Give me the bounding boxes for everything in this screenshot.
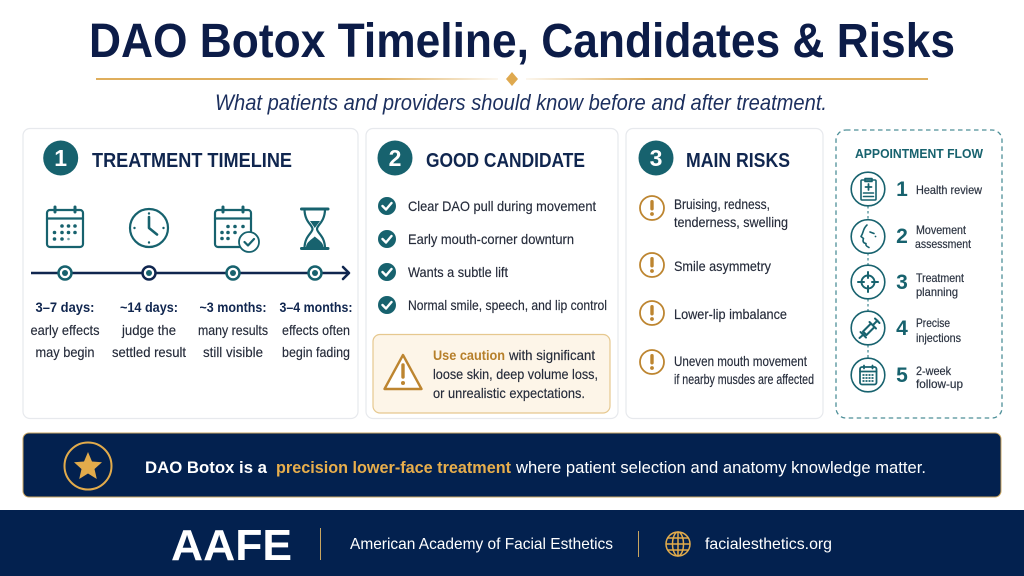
candidate checklist: Normal smile, speech, and lip control xyxy=(408,297,607,313)
milestone 3 months: many results xyxy=(198,322,268,338)
milestone 3-4 months: begin fading xyxy=(282,344,350,360)
step 2: movement assessment: Movement xyxy=(916,223,967,237)
milestone 3-4 months xyxy=(280,299,352,360)
number badge 1 xyxy=(43,140,78,176)
icon: hourglass xyxy=(302,209,328,248)
footer website: facialesthetics.org xyxy=(705,536,832,553)
icon: star badge xyxy=(64,442,112,490)
step 4: precise injections: 4 xyxy=(896,317,908,340)
icon: calendar with check xyxy=(215,207,259,252)
panel: appointment flow xyxy=(836,130,1002,418)
heading: main risks: MAIN RISKS xyxy=(686,150,790,172)
number badge 3: 3 xyxy=(650,145,662,171)
panel: main risks xyxy=(626,128,823,418)
candidate checklist: Early mouth-corner downturn xyxy=(408,231,574,247)
step 5: 2-week follow-up: 2-week xyxy=(916,364,952,378)
step 2: movement assessment xyxy=(851,220,972,253)
heading: good candidate: GOOD CANDIDATE xyxy=(426,150,585,172)
milestone 3 months xyxy=(198,299,268,360)
risk: lower-lip imbalance: Lower-lip imbalance xyxy=(674,306,787,322)
milestone 14 days: settled result xyxy=(112,344,186,360)
milestone 14 days: judge the xyxy=(121,322,176,338)
risk: smile asymmetry: Smile asymmetry xyxy=(674,258,771,274)
panel: treatment timeline xyxy=(23,128,358,418)
icon: calendar xyxy=(47,207,83,247)
panel: good candidate xyxy=(366,128,618,418)
milestone 3-7 days: early effects xyxy=(30,322,100,338)
step 1: health review: Health review xyxy=(916,183,982,197)
key message banner: where patient selection and anatomy knowledge matter. xyxy=(515,458,926,477)
candidate checklist: Wants a subtle lift xyxy=(408,264,508,280)
risk: uneven mouth movement: if nearby musdes are affected xyxy=(674,372,814,387)
step 4: precise injections: injections xyxy=(916,331,961,345)
number badge 3 xyxy=(638,140,674,176)
step 2: movement assessment: 2 xyxy=(896,225,908,248)
subtitle: What patients and providers should know before and after treatment. xyxy=(215,90,827,115)
step 5: 2-week follow-up: follow-up xyxy=(916,377,963,391)
risk: bruising: tenderness, swelling xyxy=(674,214,788,230)
number badge 2 xyxy=(378,140,412,176)
risk: bruising: Bruising, redness, xyxy=(674,196,770,212)
risk: bruising xyxy=(640,196,788,230)
callout: use caution: Use caution xyxy=(433,347,505,363)
callout: use caution: loose skin, deep volume loss, xyxy=(433,366,598,382)
icon: warning triangle xyxy=(384,355,422,389)
footer logo: AAFE: AAFE xyxy=(171,521,292,570)
key message banner xyxy=(23,433,1001,497)
milestone 3-7 days: 3–7 days: xyxy=(36,299,94,315)
number badge 1: 1 xyxy=(54,145,67,171)
milestone 14 days xyxy=(112,299,186,360)
step 1: health review xyxy=(851,172,982,206)
callout: use caution: with significant xyxy=(508,347,595,363)
milestone 3-4 months: 3–4 months: xyxy=(280,299,352,315)
icon: globe xyxy=(666,532,690,556)
footer xyxy=(0,510,1024,576)
risk: uneven mouth movement: Uneven mouth movement xyxy=(674,353,807,369)
step 1: health review: 1 xyxy=(896,178,908,201)
step 2: movement assessment: assessment xyxy=(915,237,972,251)
title divider with diamond xyxy=(96,72,928,86)
milestone 3-7 days: may begin xyxy=(36,344,94,360)
number badge 2: 2 xyxy=(389,145,401,171)
callout: use caution: or unrealistic expectations. xyxy=(433,385,585,401)
step 3: treatment planning: 3 xyxy=(896,271,908,294)
milestone 3-7 days xyxy=(30,299,100,360)
key message banner: DAO Botox is a xyxy=(145,458,268,477)
step 3: treatment planning xyxy=(851,265,965,299)
key message banner: precision lower-face treatment xyxy=(276,458,511,477)
milestone 3-4 months: effects often xyxy=(282,322,350,338)
heading: appointment flow: APPOINTMENT FLOW xyxy=(855,146,984,161)
step 3: treatment planning: planning xyxy=(916,285,958,299)
heading: treatment timeline: TREATMENT TIMELINE xyxy=(92,150,292,172)
footer organization name: American Academy of Facial Esthetics xyxy=(350,536,613,553)
milestone 3 months: still visible xyxy=(203,344,263,360)
step 5: 2-week follow-up xyxy=(851,358,963,392)
icon: clock xyxy=(130,209,168,247)
step 4: precise injections xyxy=(851,311,961,345)
callout: use caution xyxy=(373,334,610,413)
risk: uneven mouth movement xyxy=(640,350,814,387)
milestone 3 months: ~3 months: xyxy=(200,299,266,315)
step 4: precise injections: Precise xyxy=(916,316,950,330)
step 3: treatment planning: Treatment xyxy=(916,271,965,285)
timeline arrow xyxy=(31,266,349,280)
connector dots xyxy=(867,206,869,358)
risk: lower-lip imbalance xyxy=(640,301,787,325)
milestone 14 days: ~14 days: xyxy=(120,299,178,315)
step 5: 2-week follow-up: 5 xyxy=(896,364,908,387)
risk: smile asymmetry xyxy=(640,253,771,277)
title: DAO Botox Timeline, Candidates & Risks xyxy=(89,15,955,68)
candidate checklist xyxy=(378,197,607,314)
candidate checklist: Clear DAO pull during movement xyxy=(408,198,596,214)
